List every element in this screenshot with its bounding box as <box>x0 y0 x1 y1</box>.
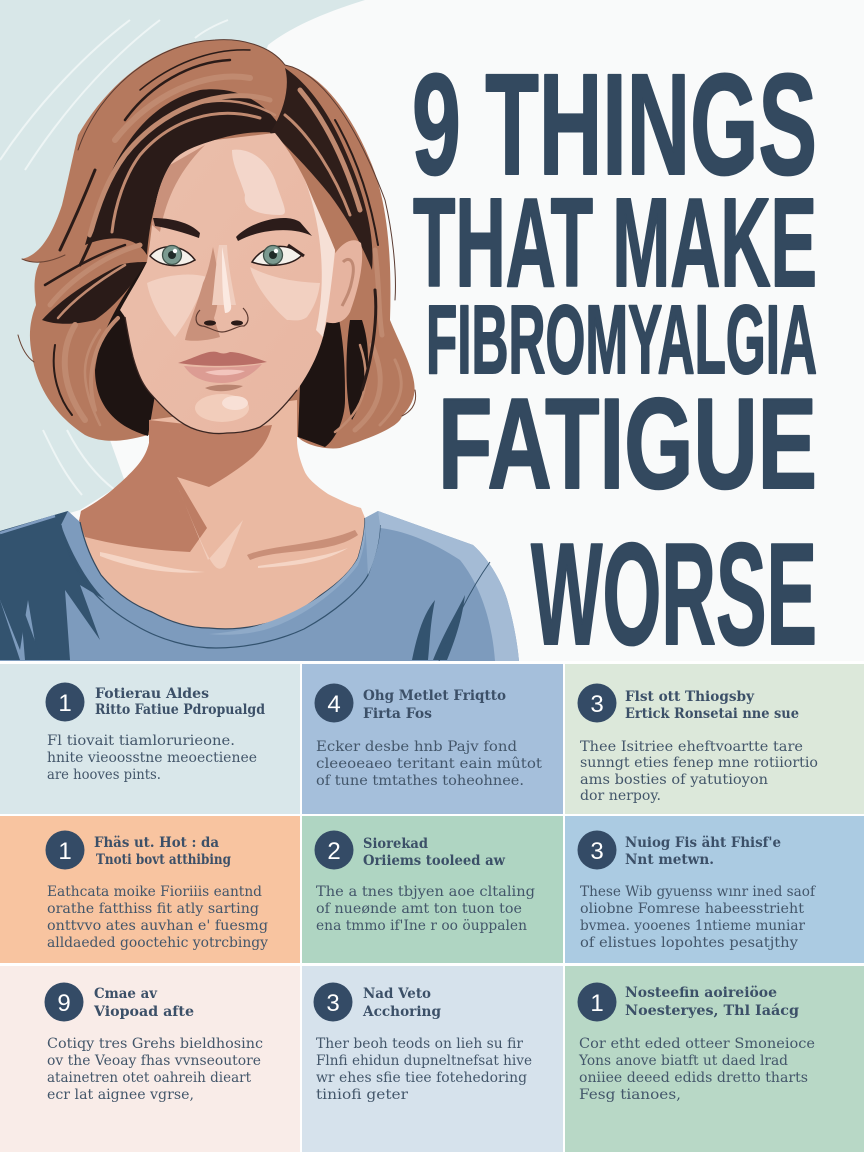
panel: row 2 column 1: Eathcata moike Fioriiis eantnd <box>47 884 262 900</box>
panel: row 3 column 2: wr ehes sfie tiee fotehedoring <box>316 1070 527 1086</box>
background <box>0 0 864 664</box>
panel: row 2 column 2: Siorekad <box>363 836 429 852</box>
panel: row 1 column 2: cleeoeaeo teritant eain mûtot <box>316 756 543 772</box>
hair dark masses <box>85 89 285 255</box>
eyes <box>150 247 195 266</box>
panel: row 2 column 1: Fhäs ut. Hot : da <box>94 835 219 851</box>
panel: row 2 column 1: Tnoti bovt atthibing <box>96 852 231 868</box>
panel: row 3 column 2 <box>302 966 563 1152</box>
panel: row 1 column 1: hnite vieoosstne meoectienee <box>47 750 257 766</box>
panel: row 2 column 3: These Wib gyuenss wınr ined saof <box>580 884 816 900</box>
panel: row 3 column 2: 3 <box>326 990 340 1017</box>
panel: row 1 column 2 <box>302 664 563 814</box>
panel: row 2 column 3: Nuiog Fis äht Fhisf'e <box>625 835 781 851</box>
panel: row 3 column 2: Nad Veto <box>363 986 431 1002</box>
hair strands dark and wisps <box>18 40 416 416</box>
portrait: woman with auburn bob <box>0 40 519 661</box>
panel: row 2 column 1: 1 <box>58 838 72 865</box>
panel: row 2 column 1: alldaeded gooctehic yotrcbingy <box>47 935 268 951</box>
panel: row 1 column 2: Ohg Metlet Friqtto <box>363 688 506 704</box>
panel: row 2 column 2 <box>302 816 563 963</box>
panel: row 3 column 2: Flnfi ehidun dupneltnefsat hive <box>316 1053 532 1069</box>
panel: row 3 column 1: 9 <box>57 990 71 1017</box>
panel: row 2 column 2: of nueønde amt ton tuon toe <box>316 901 522 917</box>
panel: row 2 column 3 <box>565 816 864 963</box>
panel: row 3 column 2: tiniofi geter <box>316 1087 409 1103</box>
grid backing <box>0 661 864 1152</box>
panel: row 1 column 3: sunngt eties fenep mne rotiiortio <box>580 755 818 771</box>
panel: row 2 column 3: 3 <box>590 838 604 865</box>
panel: row 3 column 1: Viopoad afte <box>93 1004 194 1020</box>
panel: row 1 column 2: of tune tmtathes toheohnee. <box>316 773 524 789</box>
hair base <box>22 40 415 448</box>
panel: row 3 column 3: Nosteefin aoireiöoe <box>625 985 777 1001</box>
panel: row 1 column 2: Firta Fos <box>363 706 432 722</box>
hair strands light <box>50 77 401 432</box>
panel: row 3 column 3: 1 <box>590 990 604 1017</box>
panel: row 2 column 3: bvmea. yooenes 1ntieme muniar <box>580 918 806 934</box>
panel: row 3 column 3: Cor etht eded otteer Smoneioce <box>579 1036 815 1052</box>
panel: row 2 column 1: onttvvo ates auvhan e' fuesmg <box>47 918 268 934</box>
panel: row 2 column 3: Nnt metwn. <box>625 852 714 868</box>
panel: row 2 column 3: of elistues lopohtes pesatjthy <box>580 935 798 951</box>
panel: row 1 column 1: 1 <box>58 690 72 717</box>
panel: row 3 column 3: oniiee deeed edids dretto tharts <box>579 1070 808 1086</box>
panel: row 2 column 2: The a tnes tbjyen aoe cltaling <box>316 884 535 900</box>
nose <box>185 247 220 341</box>
panel: row 1 column 1: Fotierau Aldes <box>95 686 209 702</box>
panel: row 2 column 2: Oriiems tooleed aw <box>363 853 505 869</box>
panel: row 3 column 1: ecr lat aignee vgrse, <box>47 1087 194 1103</box>
forehead and cheek tones <box>152 145 205 232</box>
panel: row 3 column 1: Cmae av <box>94 986 158 1002</box>
lips <box>178 352 267 366</box>
panel: row 3 column 2: Ther beoh teods on lieh su fir <box>316 1036 524 1052</box>
neck and chest <box>79 400 365 629</box>
panel: row 1 column 3: Thee Isitriee eheftvoartte tare <box>580 739 803 755</box>
panel: row 3 column 1 <box>0 966 300 1152</box>
neck shadow <box>79 420 272 552</box>
panel: row 1 column 3: 3 <box>590 691 604 718</box>
panel: row 3 column 3 <box>565 966 864 1152</box>
panel: row 1 column 3 <box>565 664 864 814</box>
panel: row 1 column 3: Ertick Ronsetai nne sue <box>625 706 799 722</box>
shirt <box>0 511 519 661</box>
panel: row 3 column 2: Acchoring <box>362 1004 442 1020</box>
title <box>412 44 817 675</box>
panel: row 2 column 2: ena tmmo if'Ine r oo öuppalen <box>316 918 527 934</box>
panel: row 3 column 1: ov the Veoay fhas vvnseoutore <box>47 1053 261 1069</box>
brows <box>153 218 200 238</box>
panel: row 3 column 1: Cotiqy tres Grehs bieldhosinc <box>47 1036 263 1052</box>
panel: row 1 column 1: are hooves pints. <box>47 767 161 783</box>
panel: row 1 column 2: Ecker desbe hnb Pajv fond <box>316 739 517 755</box>
panel: row 3 column 3: Noesteryes, Thl Iaácg <box>625 1003 800 1019</box>
chin <box>195 394 249 422</box>
panel: row 1 column 1: Fl tiovait tiamlorurieone. <box>47 733 235 749</box>
panel: row 2 column 2: 2 <box>327 838 341 865</box>
panel: row 2 column 1: orathe fatthiss fit atly sarting <box>47 901 259 917</box>
panel: row 3 column 3: Fesg tianoes, <box>579 1087 681 1103</box>
panel: row 1 column 1 <box>0 664 300 814</box>
panel: row 1 column 2: 4 <box>327 691 341 718</box>
panel: row 3 column 3: Yons anove biatft ut daed lrad <box>578 1053 788 1069</box>
ear <box>326 240 362 323</box>
panel: row 2 column 3: oliobne Fomrese habeesstrieht <box>580 901 805 917</box>
panel: row 2 column 1 <box>0 816 300 963</box>
panel: row 1 column 3: Flst ott Thiogsby <box>625 689 755 705</box>
panel: row 1 column 1: Ritto Fatiue Pdropualgd <box>95 702 266 718</box>
panel: row 1 column 3: ams bosties of yatutioyon <box>580 772 768 788</box>
face <box>120 133 335 434</box>
panel: row 3 column 1: atainetren otet oahreih dieart <box>47 1070 252 1086</box>
panel: row 1 column 3: dor nerpoy. <box>580 788 661 804</box>
